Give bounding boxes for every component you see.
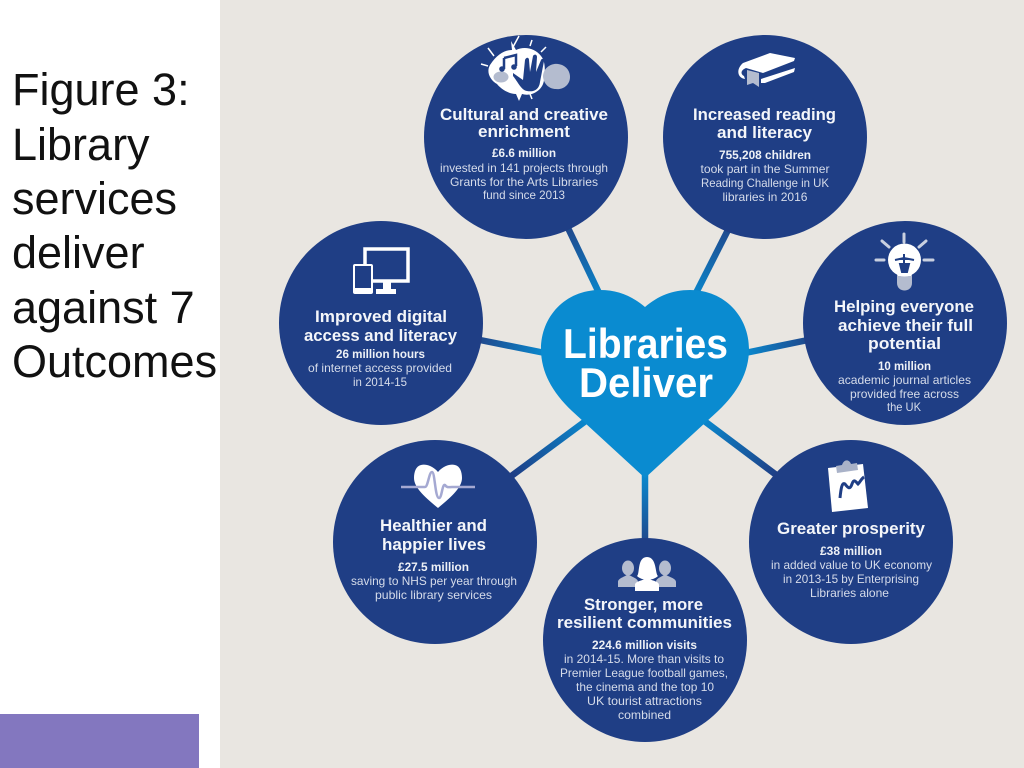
panel: greater prosperity: Greater prosperity — [777, 519, 926, 538]
panel: stronger, more resilient communities: Premier League football games, — [560, 666, 728, 680]
panel: cultural and creative enrichment — [424, 35, 628, 239]
panel: stronger, more resilient communities — [543, 538, 747, 742]
icon: three people — [618, 557, 676, 591]
panel: improved digital access and literacy: in 2014-15 — [353, 375, 407, 389]
panel: healthier and happier lives: £27.5 million — [398, 560, 469, 574]
panel: increased reading and literacy: took part in the Summer — [700, 162, 830, 176]
panel: helping everyone achieve their full potential: the UK — [887, 400, 921, 414]
panel: helping everyone achieve their full potential: 10 million — [878, 359, 931, 373]
panel: helping everyone achieve their full potential — [803, 221, 1007, 425]
title: deliver — [12, 227, 145, 278]
panel: helping everyone achieve their full potential: provided free across — [850, 387, 959, 401]
panel: stronger, more resilient communities: in 2014-15. More than visits to — [564, 652, 724, 666]
panel: stronger, more resilient communities: combined — [618, 708, 671, 722]
panel: increased reading and literacy: and literacy — [717, 123, 813, 142]
icon: paint splat with hand and music note — [481, 36, 570, 101]
panel: increased reading and literacy — [663, 35, 867, 239]
icon: clipboard with chart — [828, 460, 868, 512]
panel: cultural and creative enrichment: £6.6 million — [492, 146, 556, 160]
central heart: Libraries Deliver: Libraries — [563, 320, 728, 367]
panel: healthier and happier lives: saving to NHS per year through — [351, 574, 517, 588]
panel: improved digital access and literacy — [279, 221, 483, 425]
title: services — [12, 173, 177, 224]
panel: helping everyone achieve their full potential: Helping everyone — [834, 297, 974, 316]
central heart: Libraries Deliver — [541, 290, 749, 478]
icon: heart with pulse — [401, 465, 475, 508]
infographic background panel — [220, 0, 1024, 768]
panel: increased reading and literacy: 755,208 children — [719, 148, 811, 162]
panel: greater prosperity — [749, 440, 953, 644]
panel: improved digital access and literacy: 26 million hours — [336, 347, 425, 361]
panel: increased reading and literacy: Increased reading — [693, 105, 836, 124]
panel: greater prosperity: £38 million — [820, 544, 882, 558]
panel: greater prosperity: Libraries alone — [810, 586, 889, 600]
icon: book — [738, 53, 795, 87]
panel: healthier and happier lives: Healthier and — [380, 516, 487, 535]
icon: light bulb — [876, 234, 933, 290]
panel: greater prosperity: in 2013-15 by Enterprising — [783, 572, 919, 586]
panel: healthier and happier lives: happier lives — [382, 535, 486, 554]
icon: monitor and tablet — [354, 249, 408, 294]
panel: cultural and creative enrichment: fund since 2013 — [483, 188, 565, 202]
title: against 7 — [12, 282, 195, 333]
panel: greater prosperity: in added value to UK economy — [771, 558, 932, 572]
central heart: Libraries Deliver: Deliver — [579, 359, 713, 406]
panel: stronger, more resilient communities: the cinema and the top 10 — [576, 680, 714, 694]
title: Figure 3: — [12, 64, 190, 115]
panel: healthier and happier lives — [333, 440, 537, 644]
panel: stronger, more resilient communities: resilient communities — [557, 613, 732, 632]
panel: increased reading and literacy: Reading Challenge in UK — [701, 176, 829, 190]
panel: stronger, more resilient communities: UK tourist attractions — [587, 694, 702, 708]
panel: cultural and creative enrichment: Cultural and creative — [440, 105, 608, 124]
panel: improved digital access and literacy: Improved digital — [315, 307, 447, 326]
panel: cultural and creative enrichment: enrichment — [478, 122, 570, 141]
panel: cultural and creative enrichment: Grants for the Arts Libraries — [450, 175, 598, 189]
panel: cultural and creative enrichment: invested in 141 projects through — [440, 161, 608, 175]
panel: improved digital access and literacy: of internet access provided — [308, 361, 452, 375]
panel: stronger, more resilient communities: 224.6 million visits — [592, 638, 697, 652]
panel: helping everyone achieve their full potential: academic journal articles — [838, 373, 971, 387]
panel: helping everyone achieve their full potential: potential — [868, 334, 941, 353]
title: Outcomes — [12, 336, 217, 387]
title — [12, 64, 217, 387]
panel: stronger, more resilient communities: Stronger, more — [584, 595, 703, 614]
panel: increased reading and literacy: libraries in 2016 — [722, 190, 808, 204]
panel: helping everyone achieve their full potential: achieve their full — [838, 316, 973, 335]
connector lines — [480, 228, 808, 542]
purple footer block — [0, 714, 199, 768]
title: Library — [12, 119, 150, 170]
panel: healthier and happier lives: public library services — [375, 588, 492, 602]
panel: improved digital access and literacy: access and literacy — [304, 326, 458, 345]
